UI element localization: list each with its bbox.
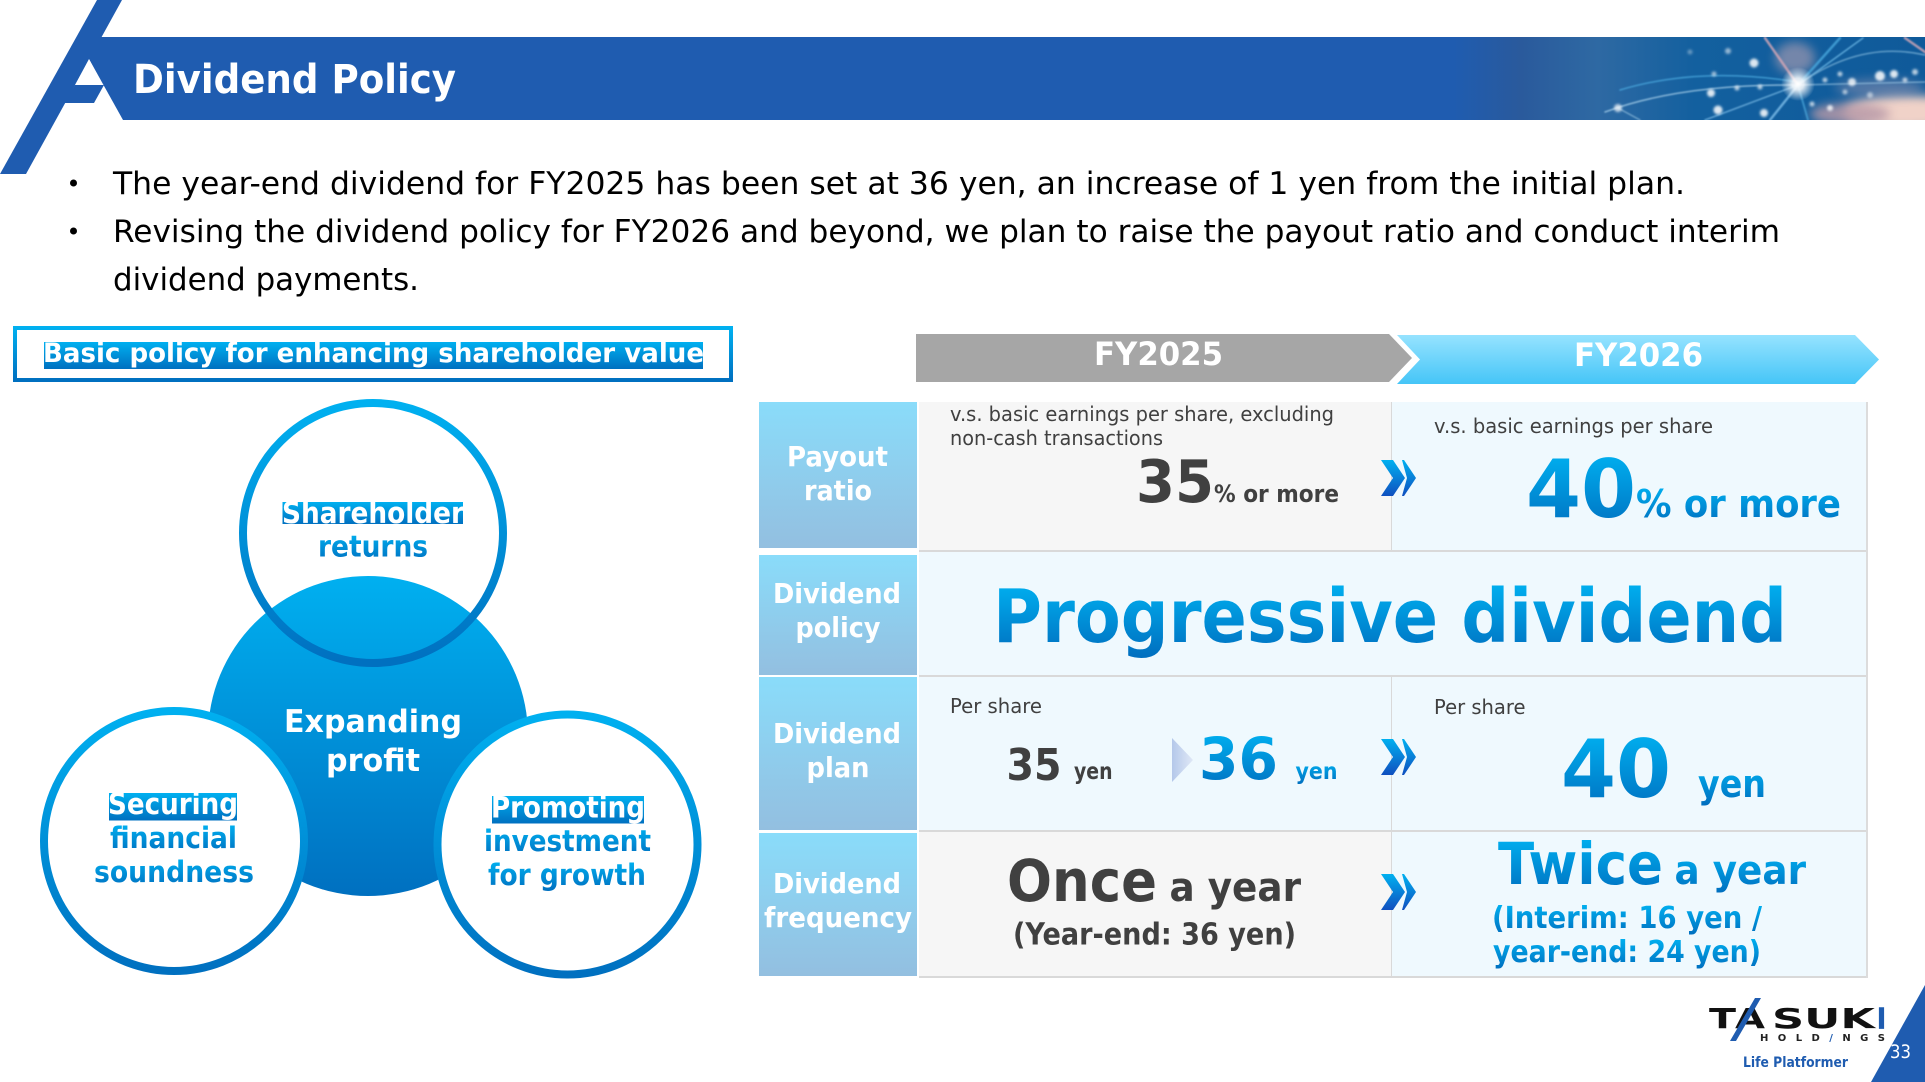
header arrow: FY2026: FY2026 [1574, 336, 1703, 374]
table row: dividend frequency: Twice [1498, 830, 1663, 898]
circle: promoting investment for growth [438, 714, 698, 974]
circle: securing financial soundness: soundness [94, 855, 254, 889]
table row: dividend frequency: a year [1170, 865, 1301, 911]
table row: dividend plan: 35 [1006, 740, 1062, 791]
header arrow: FY2025: FY2025 [1094, 335, 1223, 373]
page number corner: 33 [1890, 1041, 1911, 1063]
table row: dividend plan: Dividend [773, 717, 901, 750]
table row: dividend frequency [759, 830, 1868, 978]
title: Dividend Policy [133, 57, 456, 103]
table row: payout ratio: % or more [1636, 482, 1841, 526]
table row: dividend frequency: Dividend [773, 867, 901, 900]
circle: promoting investment for growth: Promoting [491, 790, 645, 824]
logo: Tasuki Holdings: Life Platformer [1743, 1055, 1848, 1071]
table row: payout ratio: v.s. basic earnings per share [1434, 414, 1713, 438]
table row: dividend plan [759, 677, 1868, 832]
header arrow: FY2026 [1397, 335, 1879, 384]
table row: dividend policy [759, 552, 1868, 677]
table row: dividend plan: yen [1074, 759, 1112, 785]
table row: dividend frequency: frequency [764, 901, 912, 934]
table row: dividend plan: yen [1296, 759, 1338, 785]
table row: dividend plan: 40 [1561, 723, 1671, 816]
logo: Tasuki Holdings: T [1709, 1002, 1736, 1035]
circle: securing financial soundness: Securing [108, 787, 238, 821]
logo: Tasuki Holdings: SUK [1772, 1002, 1877, 1035]
table row: dividend frequency: Once [1007, 847, 1157, 915]
center circle: expanding profit: Expanding [284, 704, 462, 740]
table row: payout ratio: % or more [1214, 480, 1339, 508]
table row: payout ratio: 40 [1526, 443, 1636, 536]
intro bullet text: The year-end dividend for FY2025 has been set at 36 yen, an increase of 1 yen from the initial plan. [112, 166, 1685, 202]
header banner [0, 0, 1925, 174]
table row: dividend plan: 36 [1199, 725, 1278, 793]
center circle: expanding profit [208, 576, 528, 896]
circle: shareholder returns: Shareholder [282, 496, 465, 530]
circle: promoting investment for growth: investment [484, 824, 651, 858]
chevron arrow: payout ratio [1381, 460, 1416, 496]
center circle: expanding profit: profit [326, 743, 420, 779]
logo: Tasuki Holdings: A [1735, 1002, 1765, 1035]
intro bullet text [70, 166, 1780, 298]
table row: payout ratio: Payout [787, 440, 888, 473]
table row: dividend plan: Per share [1434, 695, 1526, 719]
table row: payout ratio: non-cash transactions [950, 426, 1163, 450]
table row: dividend policy: policy [796, 611, 880, 644]
logo: Tasuki Holdings: HOLD / NGS [1760, 1033, 1885, 1044]
table row: dividend plan: plan [806, 751, 870, 784]
table row: payout ratio [759, 402, 1868, 552]
chevron arrow: dividend plan [1381, 739, 1416, 775]
intro bullet text: Revising the dividend policy for FY2026 and beyond, we plan to raise the payout ratio and conduct interim [113, 214, 1780, 250]
circle: promoting investment for growth: for growth [488, 858, 646, 892]
table row: dividend frequency: a year [1674, 848, 1806, 894]
table row: payout ratio: 35 [1136, 447, 1214, 516]
circle: securing financial soundness [44, 711, 304, 971]
intro bullet text: dividend payments. [113, 262, 419, 298]
circle: shareholder returns [243, 403, 503, 663]
circle: shareholder returns: returns [318, 530, 428, 564]
table row: dividend frequency: year-end: 24 yen) [1493, 935, 1761, 970]
header decorative network image [1605, 38, 1925, 129]
circle: securing financial soundness: financial [110, 821, 237, 855]
chevron arrow: dividend frequency [1381, 874, 1416, 910]
table row: payout ratio: v.s. basic earnings per share, excluding [950, 402, 1334, 426]
page number corner [1871, 985, 1925, 1082]
table row: dividend policy: Dividend [773, 577, 901, 610]
logo: Tasuki Holdings: I [1878, 1002, 1886, 1035]
heading: basic policy [15, 328, 731, 380]
table row: dividend frequency: (Year-end: 36 yen) [1013, 918, 1296, 952]
heading: basic policy: Basic policy for enhancing shareholder value [43, 338, 704, 369]
table row: dividend plan: Per share [950, 694, 1042, 718]
table row: payout ratio: ratio [804, 474, 872, 507]
table row: dividend frequency: (Interim: 16 yen / [1492, 901, 1762, 936]
header arrow: FY2025 [916, 334, 1412, 382]
diagram: basic policy circles [44, 403, 698, 974]
table row: dividend policy: Progressive dividend [993, 574, 1787, 660]
logo: Tasuki Holdings [1709, 998, 1886, 1071]
table row: dividend plan: yen [1698, 762, 1766, 806]
